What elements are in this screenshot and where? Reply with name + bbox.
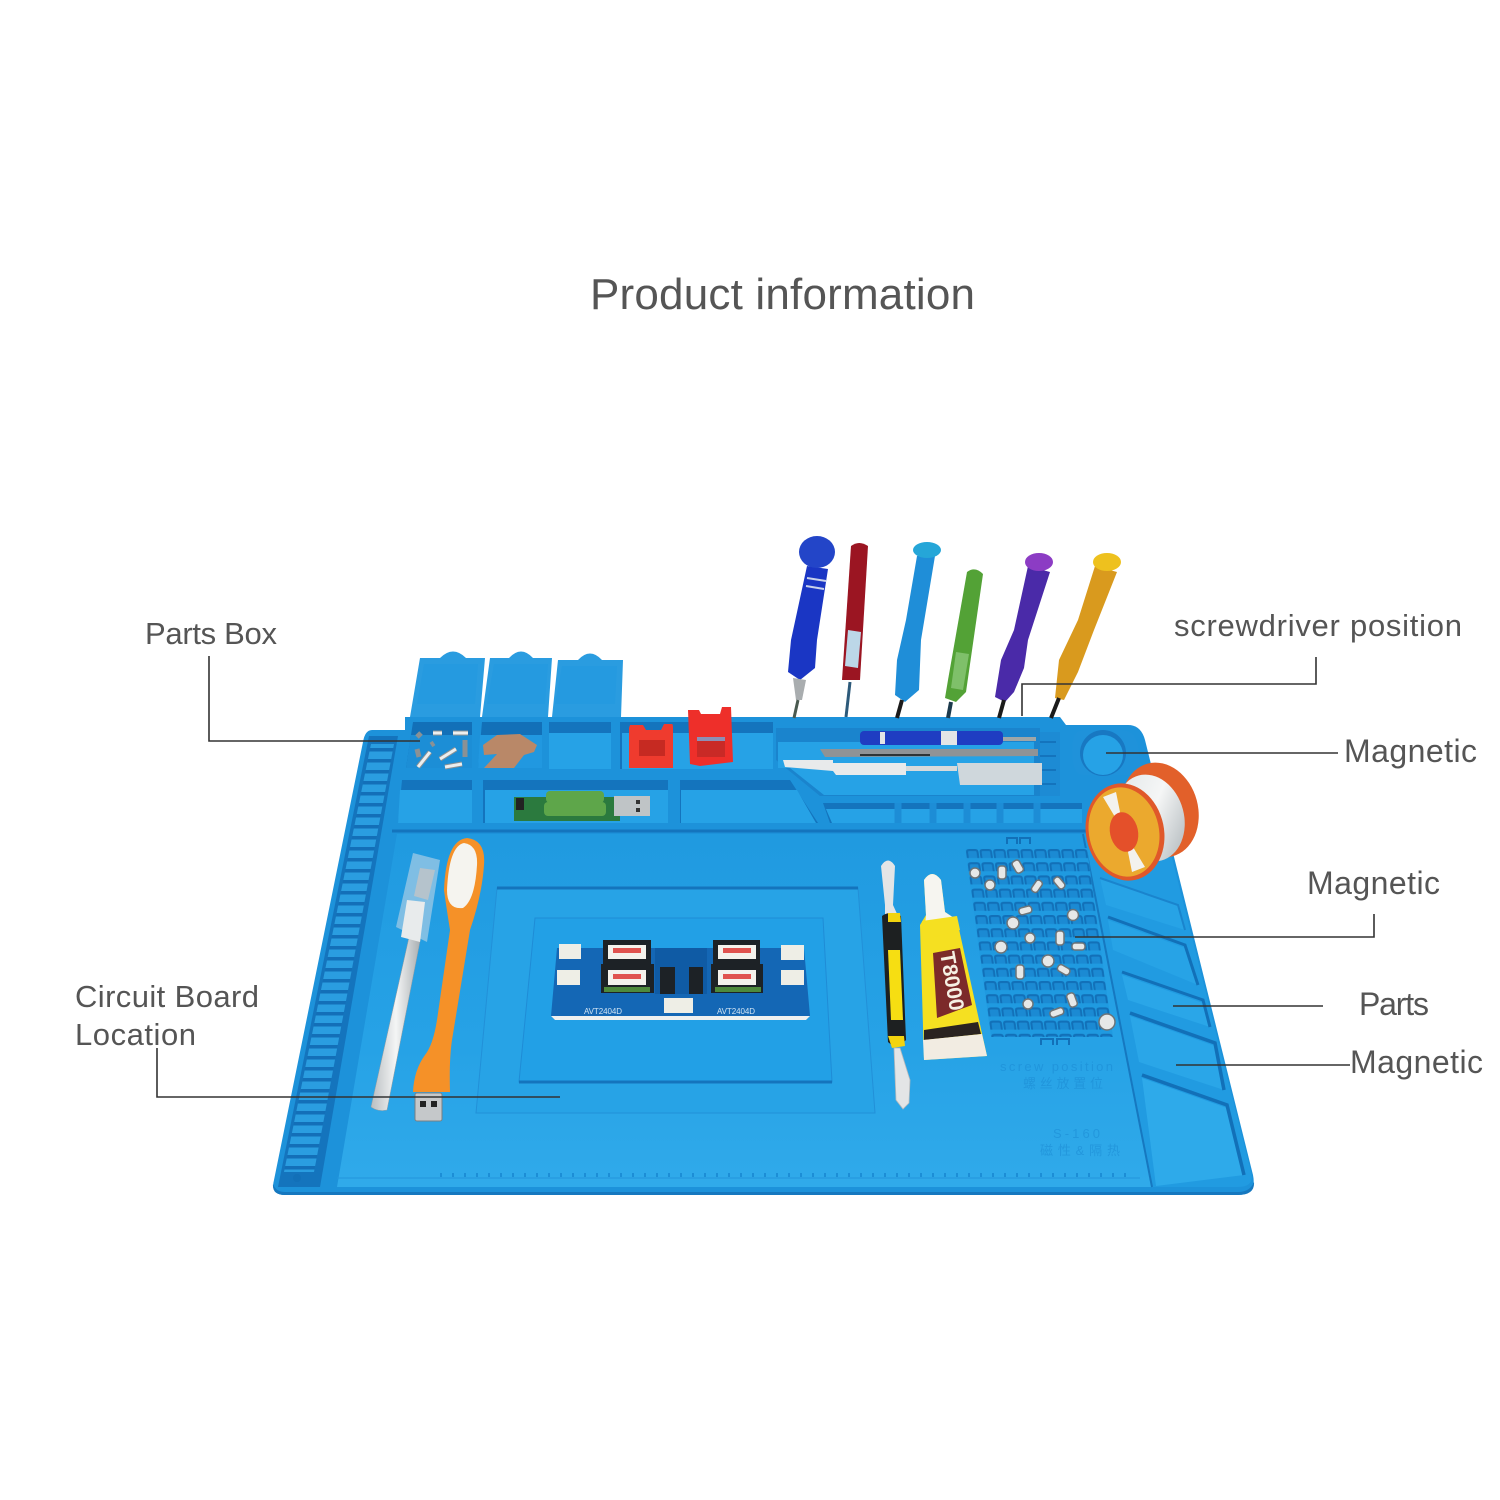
screwdriver green	[945, 569, 983, 718]
screwdriver gold	[1051, 553, 1121, 718]
faint moulded lettering	[1000, 1059, 1120, 1158]
slotted storage strip	[823, 803, 1082, 823]
tool tray	[776, 728, 1060, 796]
pry tool	[881, 860, 910, 1109]
parts box lids	[410, 652, 623, 717]
USB plug	[415, 1093, 442, 1121]
screwdriver blue	[788, 536, 835, 718]
knife bottom left	[371, 853, 440, 1111]
callout: Circuit Board Location: Circuit Board	[75, 979, 259, 1014]
callout: Circuit Board Location: Location	[75, 1017, 196, 1052]
screwdriver purple	[995, 553, 1053, 718]
faint moulded lettering: S-160	[1053, 1126, 1100, 1141]
callout: Magnetic tray: Magnetic	[1344, 733, 1477, 769]
faint moulded lettering: 螺丝放置位	[1023, 1076, 1103, 1091]
panel: silicone mat	[273, 652, 1254, 1195]
ruler scale	[440, 1173, 1130, 1177]
tray tools	[783, 731, 1042, 785]
fuses and copper	[417, 733, 537, 768]
USB resistor module	[514, 791, 650, 821]
ridged side rail	[278, 736, 398, 1187]
callout: Circuit Board Location	[75, 979, 560, 1097]
orange USB light	[413, 838, 484, 1121]
lower storage row	[398, 780, 818, 823]
right part compartments	[1083, 834, 1252, 1187]
main floor	[337, 834, 1152, 1187]
magnetic round tray	[1072, 730, 1142, 776]
callout: Parts: Parts	[1359, 986, 1429, 1022]
screwdriver red	[842, 543, 868, 717]
circuit board tray outlines	[337, 888, 1140, 1178]
solder spool	[1077, 754, 1209, 888]
parts box compartments	[406, 722, 773, 769]
callout: Parts Box: Parts Box	[145, 616, 278, 651]
red magnetizers	[629, 707, 733, 768]
mat base	[273, 717, 1254, 1195]
board print: AVT2404D	[584, 1007, 622, 1016]
screws	[970, 859, 1115, 1030]
title: Product information	[590, 270, 975, 319]
screwdriver cyan	[895, 542, 941, 718]
glue tube	[920, 874, 987, 1060]
callout: Magnetic lower: Magnetic	[1350, 1044, 1483, 1080]
circuit board	[551, 940, 810, 1020]
screw grid	[965, 838, 1113, 1045]
circuit board: AVT2404D	[717, 1007, 755, 1016]
callout: screwdriver position	[1022, 608, 1462, 716]
glue tube: T8000	[935, 950, 968, 1013]
callout: Magnetic grid	[1075, 865, 1440, 937]
faint moulded lettering: screw position	[1000, 1059, 1113, 1074]
screwdrivers	[788, 536, 1121, 718]
callout: screwdriver position: screwdriver position	[1174, 608, 1462, 643]
callout: Parts Box	[145, 616, 420, 741]
callout: Magnetic grid: Magnetic	[1307, 865, 1440, 901]
faint moulded lettering: 磁性&隔热	[1040, 1143, 1120, 1158]
